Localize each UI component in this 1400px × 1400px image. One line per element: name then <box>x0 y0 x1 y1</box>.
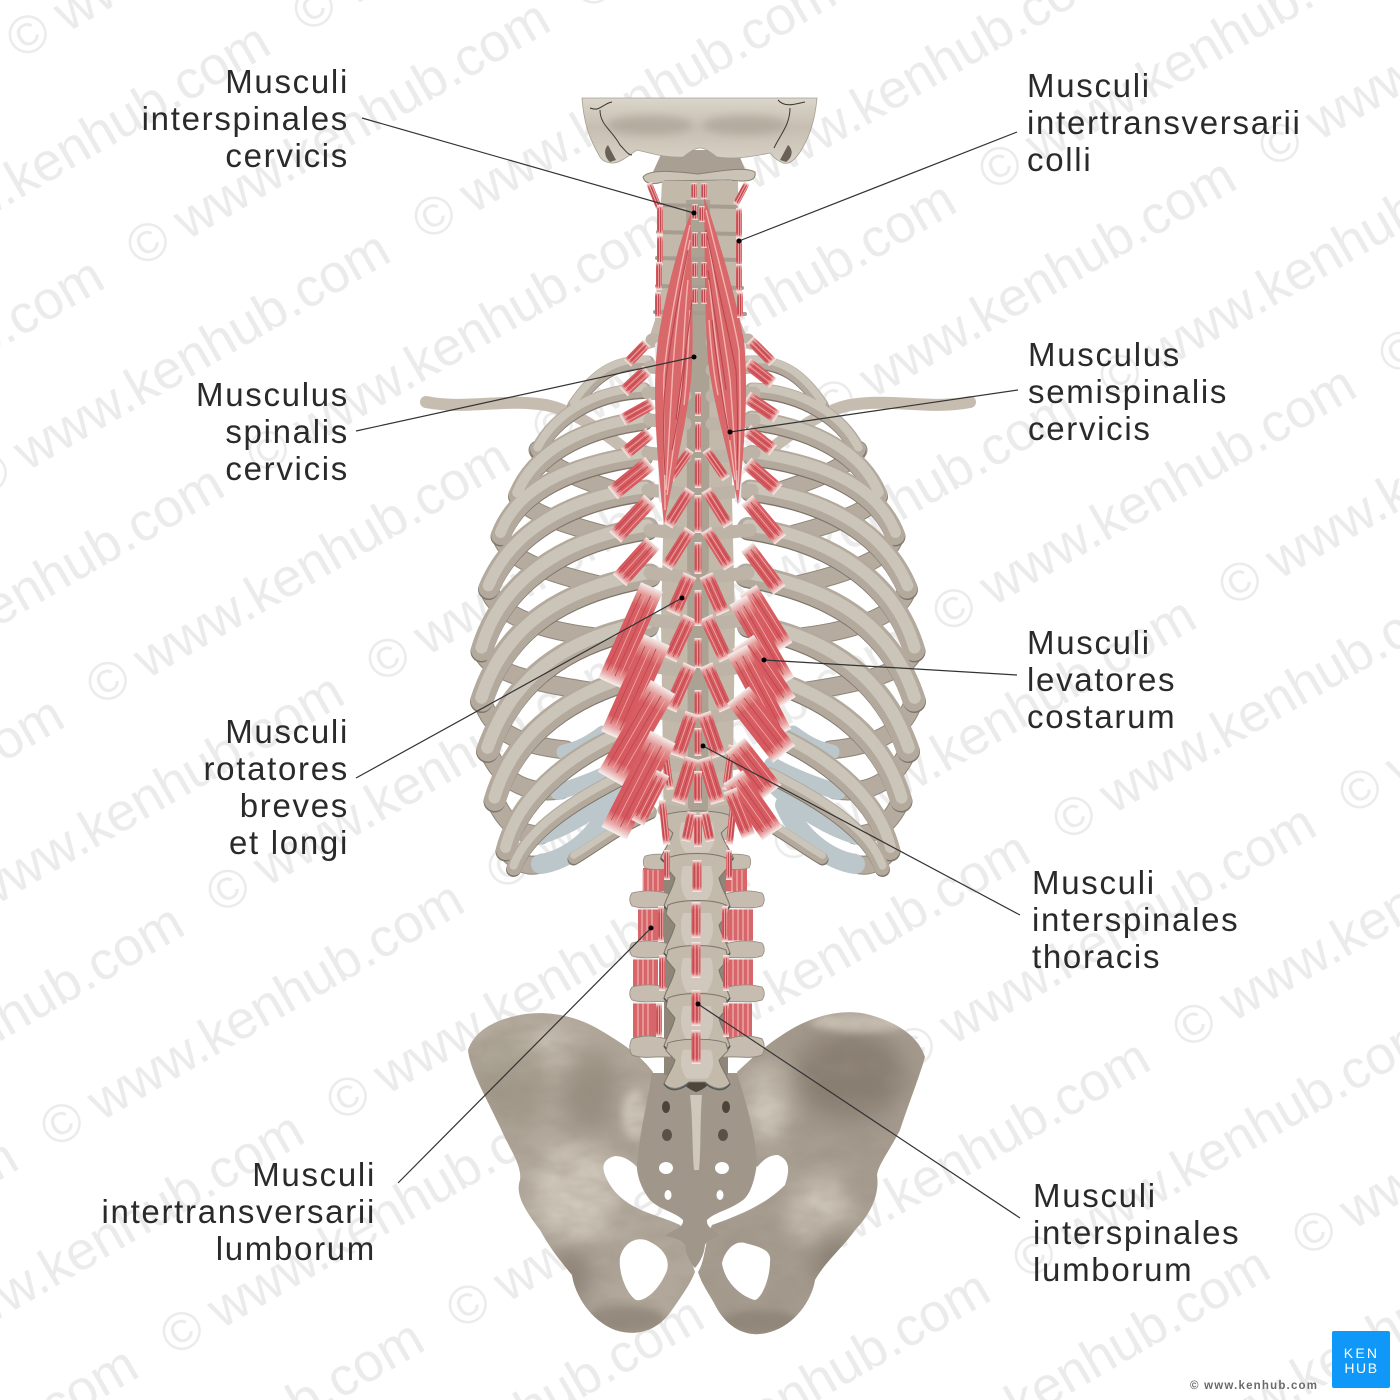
sacrum and coccyx <box>637 1072 757 1268</box>
musculi levatores costarum right <box>723 336 796 840</box>
label: Musculi interspinales cervicis: cervicis <box>225 137 349 174</box>
label: Musculi interspinales lumborum: interspinales <box>1033 1214 1240 1251</box>
label: Musculi interspinales lumborum: lumborum <box>1033 1251 1193 1288</box>
label: Musculi interspinales thoracis: Musculi <box>1032 864 1156 901</box>
skull base <box>582 98 817 184</box>
musculi interspinales <box>656 183 729 1064</box>
label: Musculi intertransversarii lumborum: intertransversarii <box>101 1193 376 1230</box>
pelvis: right hip bone <box>695 1005 935 1340</box>
pelvis: left hip bone <box>460 1005 700 1340</box>
label: Musculi levatores costarum: Musculi <box>1027 624 1151 661</box>
label: Musculi interspinales thoracis: thoracis <box>1032 938 1161 975</box>
Kenhub logo: HUB <box>1344 1360 1379 1376</box>
copyright line: © www.kenhub.com <box>1190 1380 1318 1392</box>
leader line and dot: levatores costarum <box>762 658 1017 675</box>
leader line and dot: interspinales thoracis <box>700 744 1020 915</box>
label: Musculi levatores costarum: levatores <box>1027 661 1176 698</box>
leader line and dot: rotatores <box>356 596 684 778</box>
label: Musculus spinalis cervicis: cervicis <box>225 450 349 487</box>
label: Musculi intertransversarii colli: intertransversarii <box>1027 104 1302 141</box>
musculi intertransversarii colli <box>646 182 750 318</box>
label: Musculus semispinalis cervicis: Musculus <box>1028 336 1181 373</box>
musculi levatores costarum left <box>598 340 675 840</box>
left and right rib cage <box>426 359 970 870</box>
label: Musculus semispinalis cervicis: semispinalis <box>1028 373 1228 410</box>
Kenhub logo <box>1332 1331 1390 1388</box>
leader line and dot: interspinales cervicis <box>362 118 696 216</box>
label: Musculi intertransversarii colli: Musculi <box>1027 67 1151 104</box>
vertebral column: cervical and thoracic <box>645 181 754 840</box>
label: Musculus spinalis cervicis: spinalis <box>225 413 349 450</box>
Kenhub logo: KEN <box>1344 1345 1379 1361</box>
musculus spinalis and semispinalis cervicis <box>655 196 746 525</box>
label: Musculi interspinales thoracis: interspinales <box>1032 901 1239 938</box>
leader line and dot: semispinalis cervicis <box>728 390 1018 434</box>
lumbar vertebrae and transverse processes <box>630 811 764 1090</box>
leader line and dot: intertransversarii lumborum <box>398 926 654 1183</box>
label: Musculi rotatores breves et longi: et longi <box>229 824 349 861</box>
label: Musculi interspinales cervicis: Musculi <box>225 63 349 100</box>
label: Musculi interspinales lumborum: Musculi <box>1033 1177 1157 1214</box>
leader line and dot: interspinales lumborum <box>696 1002 1020 1218</box>
label: Musculus semispinalis cervicis: cervicis <box>1028 410 1152 447</box>
label: Musculi rotatores breves et longi: rotatores <box>203 750 349 787</box>
anatomical illustration <box>426 98 970 1340</box>
label: Musculi rotatores breves et longi: Musculi <box>225 713 349 750</box>
leader line and dot: spinalis cervicis <box>356 354 696 431</box>
leader line and dot: intertransversarii colli <box>736 132 1017 244</box>
lumbar intertransversarii muscle blocks <box>633 850 753 1075</box>
label: Musculi intertransversarii lumborum: lumborum <box>216 1230 376 1267</box>
label: Musculi interspinales cervicis: interspinales <box>142 100 349 137</box>
label: Musculi intertransversarii colli: colli <box>1027 141 1092 178</box>
label: Musculi intertransversarii lumborum: Musculi <box>252 1156 376 1193</box>
label: Musculus spinalis cervicis: Musculus <box>196 376 349 413</box>
label: Musculi levatores costarum: costarum <box>1027 698 1176 735</box>
label: Musculi rotatores breves et longi: breves <box>240 787 349 824</box>
musculi rotatores <box>659 447 737 880</box>
